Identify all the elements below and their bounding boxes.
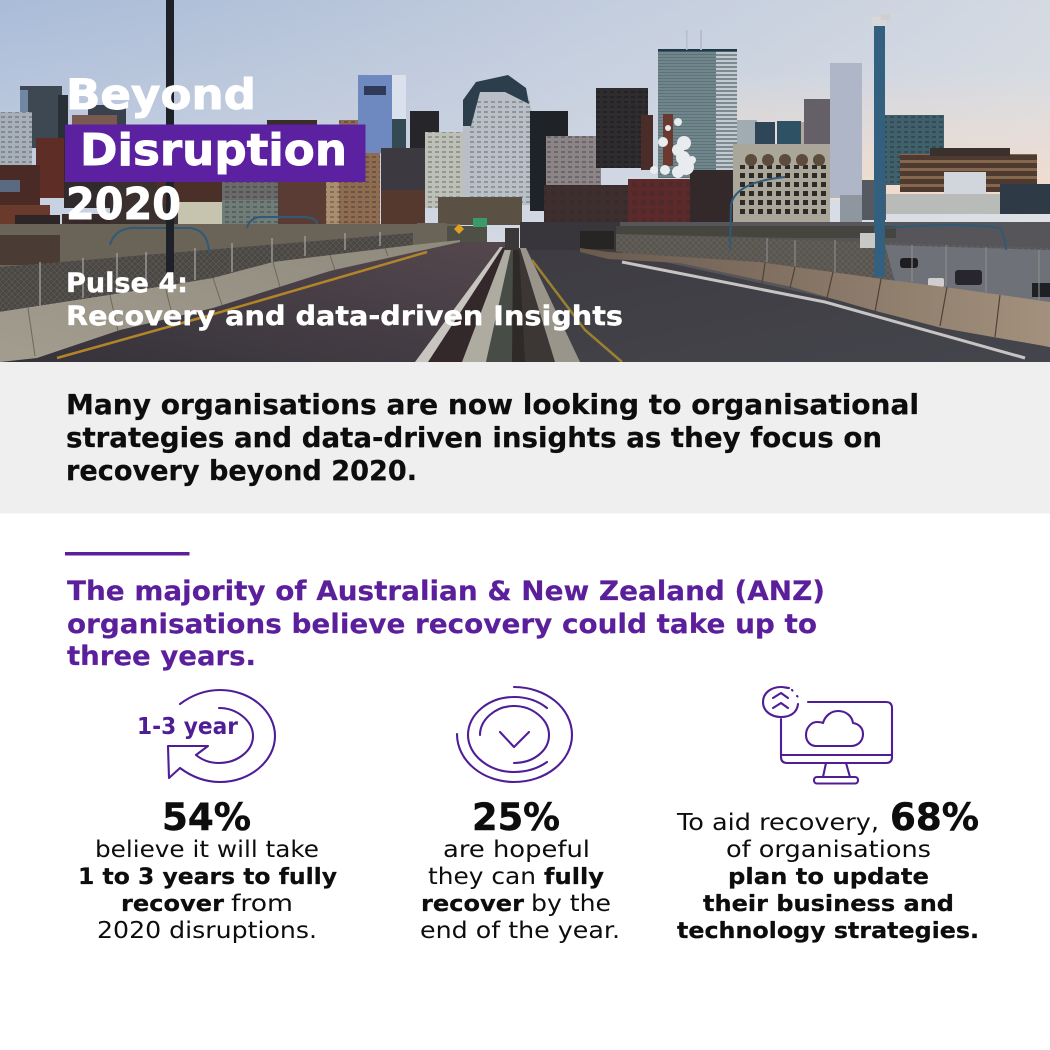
stat column: 54%: 1 to 3 years to fully: [78, 864, 337, 890]
stat column: 54%: from: [231, 891, 293, 917]
mid ground left: [0, 224, 460, 284]
figure: 68%: 68%: [890, 796, 979, 839]
stat column: 68%: technology strategies.: [677, 918, 979, 944]
title line: Disruption: Disruption: [80, 125, 347, 176]
stat column: 54%: 2020 disruptions.: [97, 918, 317, 944]
title line: Beyond: Beyond: [66, 70, 256, 119]
left skyline: [0, 75, 533, 245]
road surfaces: [0, 242, 530, 362]
title: Beyond Disruption 2020: [65, 70, 366, 230]
section heading: The majority of Australian & New Zealand (ANZ): [67, 576, 825, 607]
introduction text: strategies and data-driven insights as they focus on: [66, 422, 882, 454]
introduction text: recovery beyond 2020.: [66, 455, 417, 487]
title line: 2020: 2020: [66, 179, 181, 230]
section heading: three years.: [67, 641, 256, 672]
stat column: 25%: end of the year.: [420, 918, 620, 944]
stat column: 68%: [676, 796, 979, 944]
purple title highlight box: [65, 124, 366, 182]
stat column: 68%: To aid recovery,: [676, 810, 879, 836]
introduction text: Many organisations are now looking to organisational: [66, 389, 919, 421]
stat column: 54%: recover: [121, 891, 225, 917]
panel: grey introduction band: [0, 362, 1050, 514]
stat column: 54%: [78, 796, 337, 944]
mid ground right: [520, 222, 1050, 302]
figure: 54%: 54%: [162, 796, 251, 839]
section heading: organisations believe recovery could take up to: [67, 609, 817, 640]
stat column: 25%: they can: [428, 864, 536, 890]
stat column: 68%: plan to update: [728, 864, 929, 890]
left concrete barrier: [0, 240, 460, 362]
lane markings: [57, 252, 427, 358]
sky: [0, 0, 1050, 250]
subtitle: Pulse 4: [66, 268, 623, 332]
icon: concentric circles with down chevron: [457, 687, 572, 782]
icon: monitor with cloud and upload badge: [763, 687, 892, 784]
stat column: 54%: believe it will take: [95, 837, 319, 863]
right concrete barrier: [580, 248, 1050, 347]
stat column: 68%: of organisations: [726, 837, 931, 863]
subtitle: Pulse 4: Recovery and data-driven Insights: [66, 301, 623, 332]
centre and right skyline: [530, 30, 1050, 229]
subtitle: Pulse 4: Pulse 4:: [66, 268, 188, 299]
stat column: 68%: their business and: [703, 891, 954, 917]
steam: [650, 118, 696, 178]
stat column: 25%: are hopeful: [443, 837, 590, 863]
right blue lamp post with camera: [860, 14, 890, 277]
icon label: 1-3 year: 1-3 year: [137, 714, 239, 740]
introduction text: [66, 389, 919, 487]
section heading: [67, 576, 825, 672]
icon: circular return arrow with 1-3 year: [137, 690, 275, 782]
hero photo: city skyline and empty road: [0, 0, 1050, 362]
stat column: 25%: recover: [421, 891, 525, 917]
stat column: 25%: [420, 796, 620, 944]
figure: 25%: 25%: [472, 796, 560, 839]
centre median: [497, 249, 555, 362]
left dark lamp post: [166, 0, 174, 276]
purple accent rule: [65, 552, 190, 556]
stat column: 25%: by the: [531, 891, 611, 917]
stat column: 25%: fully: [544, 864, 604, 890]
